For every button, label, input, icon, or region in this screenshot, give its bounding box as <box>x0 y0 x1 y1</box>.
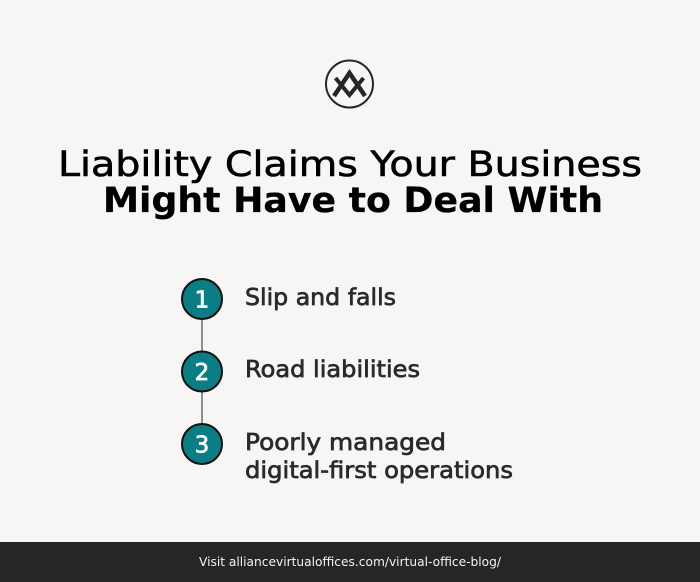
numbered list <box>182 279 513 484</box>
item 1 <box>182 279 396 319</box>
item 3: 3 <box>195 432 209 458</box>
title: Liability Claims Your Business <box>58 145 642 185</box>
item 1: 1 <box>195 288 209 314</box>
icon: logo <box>326 60 373 108</box>
item 3: Poorly managed <box>245 430 446 456</box>
item 3: digital-first operations <box>245 458 513 484</box>
item 2 <box>182 352 420 392</box>
item 3 <box>182 424 513 484</box>
item 1: Slip and falls <box>245 285 396 311</box>
item 2: Road liabilities <box>245 357 420 383</box>
footer bar: Visit alliancevirtualoffices.com/virtual-office-blog/ <box>199 555 502 569</box>
connector line 2-3 <box>201 392 203 424</box>
item 2: 2 <box>195 360 209 386</box>
footer bar <box>0 542 700 582</box>
title <box>58 145 642 221</box>
connector line 1-2 <box>201 320 203 351</box>
title: Might Have to Deal With <box>103 181 603 221</box>
